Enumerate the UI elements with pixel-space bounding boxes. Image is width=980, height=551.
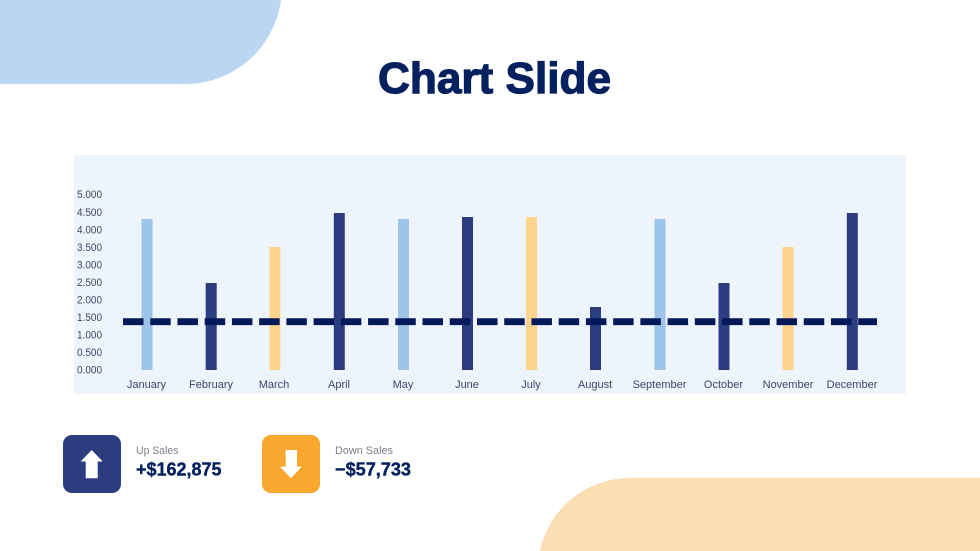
up sales label: Up Sales xyxy=(136,445,179,457)
y axis labels: 1.500 xyxy=(77,312,102,324)
decorative peach corner shape xyxy=(540,478,980,551)
panel: chart background xyxy=(74,155,906,394)
y axis labels: 4.500 xyxy=(77,207,102,219)
y axis labels: 5.000 xyxy=(77,189,102,201)
up sales stat xyxy=(63,435,222,493)
x axis labels: June xyxy=(455,379,479,391)
y axis labels: 2.500 xyxy=(77,277,102,289)
x axis labels: November xyxy=(763,379,814,391)
x axis labels: September xyxy=(633,379,687,391)
down sales value: −$57,733 xyxy=(335,458,411,480)
x axis labels: July xyxy=(521,379,541,391)
x axis labels: January xyxy=(127,379,167,391)
bar chart xyxy=(77,188,878,391)
title: Chart Slide xyxy=(378,54,611,103)
y axis labels: 1.000 xyxy=(77,330,102,342)
x axis labels: March xyxy=(259,379,289,391)
up sales value: +$162,875 xyxy=(136,458,222,480)
dashed average line xyxy=(123,318,877,325)
y axis labels xyxy=(77,189,102,376)
x axis labels: April xyxy=(328,379,350,391)
x axis labels: October xyxy=(704,379,743,391)
x axis labels: December xyxy=(827,379,878,391)
y axis labels: 3.000 xyxy=(77,260,102,272)
x axis labels: August xyxy=(578,379,612,391)
plot area xyxy=(125,188,876,370)
down sales label: Down Sales xyxy=(335,445,393,457)
y axis labels: 3.500 xyxy=(77,242,102,254)
icon: down arrow xyxy=(262,435,320,493)
x axis labels: May xyxy=(393,379,414,391)
x axis labels: February xyxy=(189,379,234,391)
bars xyxy=(142,213,858,370)
icon: up arrow xyxy=(63,435,121,493)
x axis labels xyxy=(127,379,878,391)
decorative blue corner shape xyxy=(0,0,281,84)
y axis labels: 0.500 xyxy=(77,347,102,359)
down sales stat xyxy=(262,435,411,493)
y axis labels: 0.000 xyxy=(77,364,102,376)
y axis labels: 4.000 xyxy=(77,224,102,236)
y axis labels: 2.000 xyxy=(77,294,102,306)
